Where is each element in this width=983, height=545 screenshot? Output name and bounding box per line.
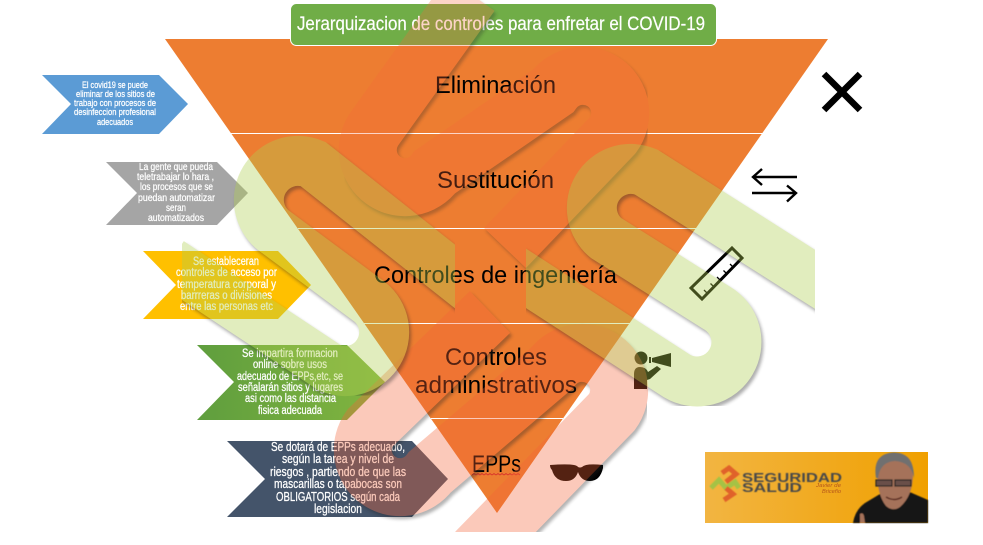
watermark: bottom red S	[363, 312, 621, 545]
logo wordmark: SALUD	[742, 480, 802, 495]
arrow callout: green, administrativos: adecuado de EPPs,etc, se	[237, 371, 343, 383]
icon: ruler	[691, 248, 742, 299]
arrow callout: green, administrativos: asi como las distancia	[245, 393, 336, 405]
arrow callout: navy, EPPs: Se dotará de EPPs adecuado,	[271, 440, 405, 454]
arrow callout: green, administrativos: Se impartira formacion	[242, 348, 338, 360]
arrow callout: yellow, ingeniería: entre las personas etc	[180, 301, 273, 313]
label: Controles administrativos: Controles	[445, 344, 547, 371]
title banner: Jerarquizacion de controles para enfretar el COVID-19	[297, 14, 705, 35]
arrow callout: yellow, ingeniería	[143, 251, 311, 319]
arrow callout: grey, sustitución: seran	[166, 202, 186, 214]
arrow callout: green, administrativos: online sobre usos	[253, 359, 327, 371]
arrow callout: blue, eliminación	[42, 75, 188, 134]
logo author name: Briceño	[822, 489, 841, 495]
watermark: right green S	[510, 169, 837, 384]
panel: inverted triangle hierarchy	[165, 39, 828, 513]
logo banner: Seguridad Salud	[705, 452, 928, 523]
arrow callout: blue, eliminación: eliminar de los sitios de	[76, 89, 155, 99]
label: Sustitución: Sustitución	[437, 167, 554, 194]
arrow callout: grey, sustitución: automatizados	[148, 212, 204, 224]
watermark: left green S	[170, 161, 474, 374]
arrow callout: green, administrativos: señalarán sitios y lugares	[238, 382, 343, 394]
watermark: safety logo S shapes	[170, 0, 837, 545]
logo portrait	[853, 452, 928, 523]
arrow callout: blue, eliminación: desinfeccion profesional	[74, 107, 156, 117]
arrow callout: navy, EPPs: legislacion	[314, 502, 362, 516]
arrow callout: grey, sustitución	[106, 161, 248, 225]
icon: swap arrows	[752, 169, 797, 202]
logo wordmark	[742, 470, 842, 495]
logo author name	[815, 483, 841, 495]
icon: person with megaphone	[634, 352, 671, 389]
arrow callout: yellow, ingeniería: controles de acceso por	[176, 267, 277, 279]
arrow callout: green, administrativos: fisica adecuada	[258, 405, 322, 417]
icon: sunglasses	[550, 464, 603, 481]
logo wordmark: SEGURIDAD	[742, 470, 842, 485]
arrow callout: blue, eliminación: adecuados	[97, 117, 133, 127]
label: Eliminación: Eliminación	[435, 72, 556, 99]
arrow callout: blue, eliminación: trabajo con procesos de	[74, 98, 156, 108]
arrow callout: green, administrativos	[197, 345, 385, 420]
arrow callout: yellow, ingeniería: Se estableceran	[193, 256, 259, 268]
arrow callout: grey, sustitución: los procesos que se	[140, 181, 213, 193]
arrow callout: blue, eliminación: El covid19 se puede	[82, 80, 148, 90]
arrow callout: yellow, ingeniería: barrreras o divisiones	[181, 290, 272, 302]
label: Controles administrativos	[415, 344, 577, 399]
label: Controles administrativos: administrativos	[415, 372, 577, 399]
logo mark	[711, 468, 739, 500]
arrow callout: navy, EPPs: OBLIGATORIOS según cada	[276, 490, 400, 504]
label: EPPs: EPPs	[472, 451, 521, 478]
arrow callout: grey, sustitución: La gente que pueda	[139, 161, 213, 173]
label: Controles de ingeniería: Controles de ingeniería	[374, 262, 618, 289]
arrow callout: navy, EPPs: según la tarea y nivel de	[282, 452, 394, 466]
arrow callout: navy, EPPs	[227, 440, 448, 517]
arrow callout: yellow, ingeniería: temperatura corporal y	[177, 279, 276, 291]
arrow callout: navy, EPPs: riesgos , partiendo de que las	[270, 465, 406, 479]
logo author name: Javier de	[815, 483, 841, 489]
title banner	[290, 4, 716, 46]
arrow callout: grey, sustitución: teletrabajar lo hara ,	[137, 171, 214, 183]
arrow callout: grey, sustitución: puedan automatizar	[138, 192, 215, 204]
watermark: top red S	[368, 0, 622, 251]
arrow callout: navy, EPPs: mascarillas o tapabocas son	[274, 477, 402, 491]
icon: cross	[824, 74, 860, 110]
